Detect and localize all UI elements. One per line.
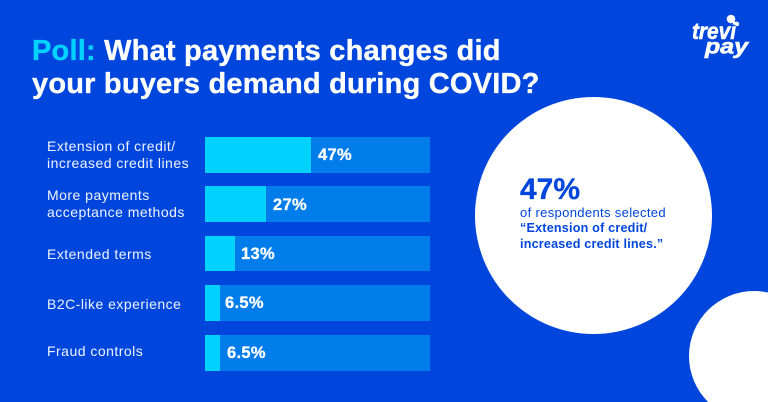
label: B2C-like experience: B2C-like experience (47, 296, 181, 312)
callout description: “Extension of credit/ (520, 221, 647, 235)
bar: more payments 27% (205, 186, 430, 222)
label: more payments acceptance methods (47, 187, 185, 220)
bar: B2C-like experience 6.5%: 6.5% (225, 294, 264, 312)
label: extension of credit: Extension of credit/ (47, 138, 176, 154)
label: more payments acceptance methods: More payments (47, 187, 150, 203)
callout description: of respondents selected (520, 205, 666, 220)
label: extended terms: Extended terms (47, 246, 152, 262)
label: extension of credit (47, 138, 189, 170)
bar: B2C-like experience 6.5% (205, 285, 430, 321)
logo: TreviPay: pay (704, 36, 750, 58)
title (32, 34, 540, 100)
callout text (520, 173, 666, 251)
callout circle (475, 97, 712, 334)
logo: TreviPay: trevi (692, 18, 737, 44)
bar: fraud controls 6.5%: 6.5% (227, 344, 266, 362)
callout description (520, 205, 666, 251)
label: extension of credit: increased credit lines (47, 154, 189, 170)
bar: extended terms 13%: 13% (241, 245, 275, 263)
logo: TreviPay (692, 14, 750, 58)
corner circle (689, 291, 768, 402)
label: fraud controls: Fraud controls (47, 343, 143, 359)
bar: extension of credit 47%: 47% (318, 146, 352, 164)
label: more payments acceptance methods: acceptance methods (47, 204, 185, 220)
title: your buyers demand during COVID? (32, 68, 540, 100)
title: Poll: What payments changes did (32, 34, 501, 66)
bar: extension of credit 47% (205, 137, 430, 173)
bar: extended terms 13% (205, 236, 430, 271)
bar: more payments 27%: 27% (273, 196, 307, 214)
bar: fraud controls 6.5% (205, 335, 430, 371)
callout number: 47% (520, 173, 580, 206)
callout description: increased credit lines.” (520, 237, 663, 251)
